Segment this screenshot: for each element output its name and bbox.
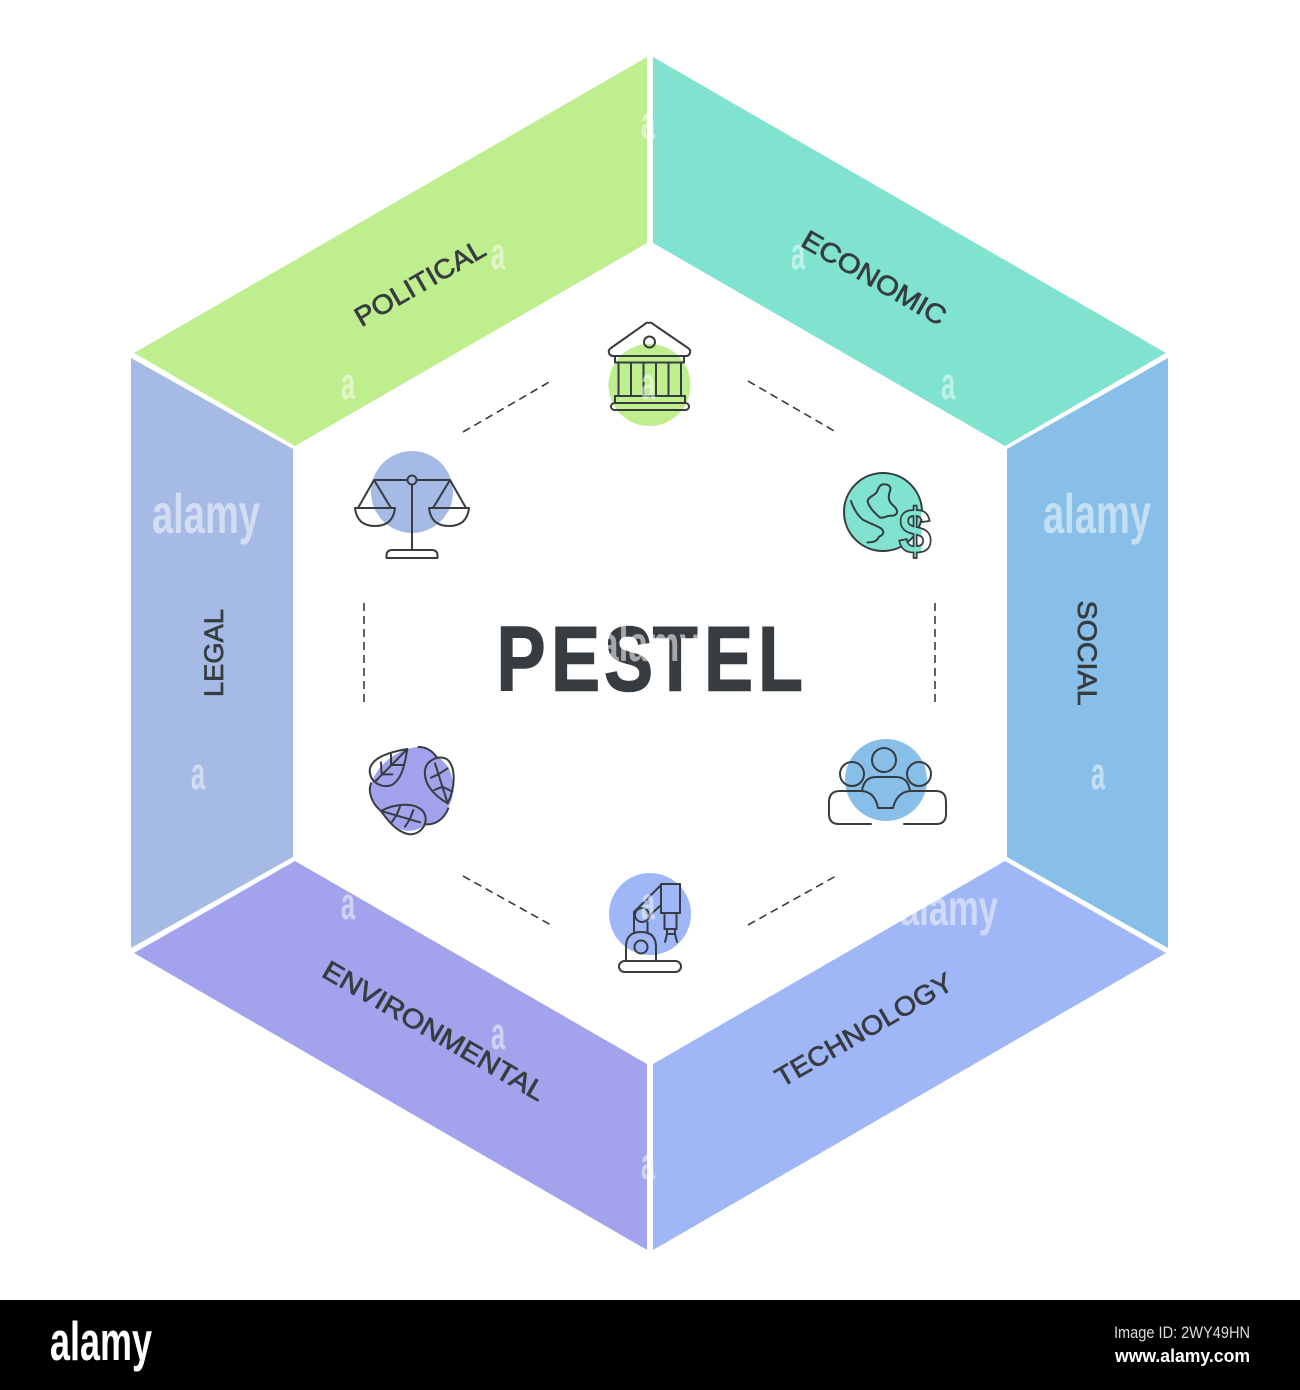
political segment (134, 57, 647, 446)
legal label: LEGAL (199, 609, 229, 697)
social segment (1007, 358, 1168, 948)
watermarks: alamy (1043, 482, 1151, 545)
environmental label: ENVIRONMENTAL (317, 955, 551, 1107)
footer bar (0, 1300, 1300, 1390)
icon: robotic arm (609, 873, 691, 972)
watermarks: alamy (152, 482, 260, 545)
technology segment (653, 861, 1166, 1250)
watermarks: alamy (900, 880, 998, 936)
watermarks: a (191, 748, 206, 799)
legal segment (131, 358, 293, 948)
watermarks: a (941, 358, 956, 409)
footer logo: alamy (50, 1310, 152, 1372)
technology label: TECHNOLOGY (770, 967, 958, 1093)
icon: government building (608, 323, 690, 426)
watermarks: a (641, 358, 656, 409)
icon: recycling leaves (370, 747, 454, 834)
political label: POLITICAL (349, 234, 491, 332)
icon: globe with dollar (844, 473, 932, 567)
watermarks: a (641, 1138, 656, 1189)
watermarks: a (491, 1008, 506, 1059)
icon: justice scales (355, 451, 469, 558)
watermarks: a (491, 228, 506, 279)
title: PESTEL (496, 608, 803, 710)
panel: technology (653, 861, 1166, 1250)
watermarks: a (641, 878, 656, 929)
icon: globe with dollar: $ (898, 495, 932, 567)
watermarks (152, 97, 1151, 1189)
panel: social (1007, 358, 1168, 948)
image id: Image ID: 2WY49HN (1114, 1323, 1250, 1342)
watermarks: a (1091, 748, 1106, 799)
environmental segment (134, 861, 647, 1250)
watermarks: a (341, 878, 356, 929)
economic segment (653, 57, 1166, 446)
panel: environmental (134, 861, 647, 1250)
website: www.alamy.com (1114, 1346, 1250, 1366)
dashed connectors (364, 381, 935, 925)
economic label: ECONOMIC (796, 225, 952, 331)
panel: legal (131, 358, 293, 948)
watermarks: a (641, 97, 656, 148)
watermarks: a (791, 228, 806, 279)
social label: SOCIAL (1072, 600, 1102, 706)
panel: political (134, 57, 647, 446)
panel: economic (653, 57, 1166, 446)
watermarks: alamy (599, 616, 699, 672)
watermarks: a (341, 358, 356, 409)
icon: group of people (829, 739, 946, 824)
